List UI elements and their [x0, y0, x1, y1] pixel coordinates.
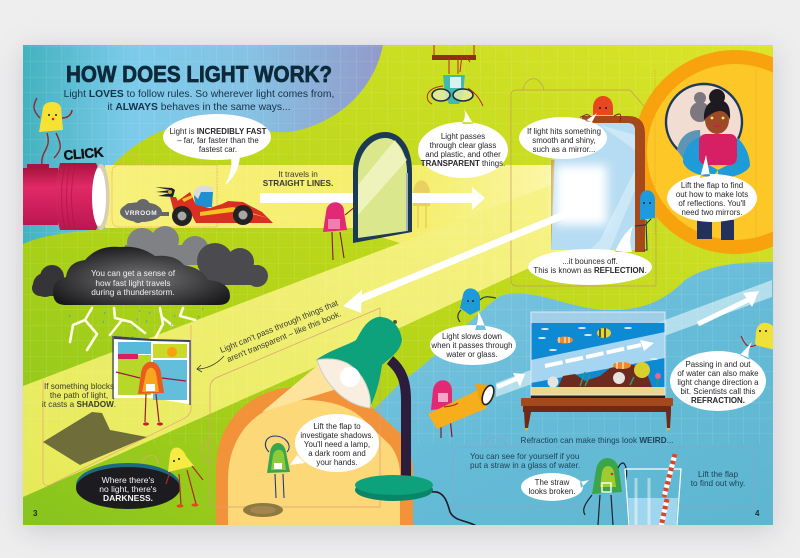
portrait: woman with mirror — [666, 84, 750, 240]
wheels — [172, 205, 253, 226]
arrow: dashed refraction in tank — [545, 340, 654, 366]
eyes and mouth — [711, 117, 724, 127]
arrow: straight line of light — [260, 187, 485, 210]
bubble: refraction: of water can also make — [677, 369, 759, 378]
beam: reflected light band — [23, 185, 568, 497]
bubble: investigate shadows: a dark room and — [308, 449, 366, 458]
page number 3: 3 — [33, 509, 38, 518]
character: orange holding book — [116, 362, 186, 426]
bubble: refraction: bit. Scientists call this — [680, 387, 756, 396]
lamp — [316, 317, 433, 501]
racing car — [155, 186, 273, 226]
face — [705, 111, 729, 134]
bubble: light slows down: Light slows down — [442, 332, 502, 341]
cloud: vrroom exhaust: VRROOM — [125, 210, 157, 217]
flap outline: horizontal car flap — [112, 154, 217, 227]
glass of water with straw — [625, 454, 681, 527]
shape: pale yellow lamp arch interior — [228, 400, 400, 525]
bubble: incredibly fast: Light is INCREDIBLY FAST — [170, 127, 266, 136]
faint character behind glass mirror — [413, 180, 430, 228]
title: HOW DOES LIGHT WORK? — [66, 61, 332, 87]
pink flap held — [699, 134, 737, 165]
text: lift flap why: to find out why. — [691, 479, 745, 488]
bubble: lift the flap mirrors: Lift the flap to find — [681, 181, 743, 190]
shape: light cone from lamp — [262, 365, 372, 412]
book held up — [113, 336, 190, 405]
character: yellow jumping on torch — [34, 98, 72, 166]
arrow: reflected ray — [343, 212, 564, 313]
bubble: if light hits — [519, 113, 607, 159]
label: click: CLICK — [63, 145, 104, 163]
arrow: curved to book — [197, 356, 224, 372]
subtitle: Light LOVES to follow rules. So wherever light comes from, — [64, 89, 334, 100]
bubble: investigate shadows: You'll need a lamp, — [304, 440, 370, 449]
flap outline: lamp flap — [201, 308, 380, 507]
bubble: refraction: REFRACTION. — [691, 396, 745, 405]
text: weird: Refraction can make things look WEIRD... — [521, 436, 673, 445]
shape: orange lamp arch — [216, 387, 413, 525]
bubble: light slows down: water or glass. — [445, 350, 498, 359]
bubble: bounces off: ...it bounces off. — [562, 257, 618, 266]
fish — [538, 327, 658, 369]
background: water wave area — [374, 262, 773, 525]
text: transparent note rotated: Light can't pass through things that — [219, 298, 340, 355]
flap outline: shadow flap — [43, 325, 191, 485]
hanging glass character — [427, 45, 483, 106]
bubble: transparent: and plastic, and other — [425, 150, 501, 159]
page number 4: 4 — [755, 509, 760, 518]
ring: orange circle — [638, 50, 773, 254]
helmet and driver — [194, 187, 213, 207]
bubble: investigate shadows: investigate shadows. — [300, 431, 374, 440]
hole: darkness: DARKNESS. — [103, 493, 153, 503]
title block — [64, 61, 334, 113]
bubble: straw looks broken: The straw — [535, 478, 570, 487]
text: thunderstorm: during a thunderstorm. — [91, 287, 175, 297]
bubble: straw looks broken: looks broken. — [529, 487, 575, 496]
text: straw instructions: put a straw in a glass of water. — [470, 461, 580, 470]
bubble: transparent — [418, 109, 508, 178]
hole: darkness: no light, there's — [99, 484, 157, 494]
hole: darkness: Where there's — [102, 475, 154, 485]
rear wing — [155, 187, 175, 197]
wing strut — [170, 197, 182, 212]
character: red on mirror top — [580, 96, 621, 122]
text: shadow: it casts a SHADOW. — [42, 400, 116, 409]
rocks and plants — [548, 362, 661, 388]
lamp shade — [316, 317, 402, 407]
mirror: reflective wall mirror — [551, 116, 645, 252]
shadow under green character — [243, 503, 283, 517]
lamp bulb — [340, 367, 360, 387]
bubble: incredibly fast — [163, 114, 271, 185]
bubble: light slows down: when it passes through — [430, 341, 513, 350]
shadow of book on floor — [43, 412, 147, 465]
bubble: bounces off — [528, 226, 652, 285]
legs — [697, 220, 734, 240]
reflection: grey hair — [677, 92, 710, 160]
cloud: dark left — [32, 265, 72, 297]
character: blue behind mirror — [635, 190, 655, 250]
mirror: arched glass pane — [353, 132, 412, 243]
hair — [704, 100, 730, 120]
character: blue by bubble — [458, 288, 496, 322]
cloud: main — [53, 247, 230, 305]
arms right — [718, 137, 750, 178]
stripes — [182, 195, 268, 218]
bubble: transparent: Light passes — [441, 132, 485, 141]
bubble: refraction: light change direction a — [677, 378, 759, 387]
bubble: if light hits: smooth and shiny, — [532, 136, 596, 145]
lamp cord — [432, 492, 478, 527]
bubble: investigate shadows — [290, 414, 379, 472]
bubble: light slows down — [430, 311, 516, 365]
hair bun — [709, 89, 725, 102]
bubble: if light hits: such as a mirror... — [533, 145, 595, 154]
bubble: lift the flap mirrors: of reflections. You'll — [678, 199, 746, 208]
text: straight lines: STRAIGHT LINES. — [263, 179, 333, 188]
bubble: investigate shadows: Lift the flap to — [313, 422, 361, 431]
lightning and rain — [66, 308, 203, 350]
text: shadow: If something blocks — [44, 382, 114, 391]
text: thunderstorm: You can get a sense of — [91, 268, 176, 278]
text: lift flap why: Lift the flap — [698, 470, 738, 479]
text: shadow — [42, 382, 116, 409]
text: transparent note rotated: aren't transparent – like this book. — [226, 309, 342, 364]
text: straw instructions — [470, 452, 580, 470]
bubble: refraction: Passing in and out — [686, 360, 751, 369]
bubble: lift the flap mirrors: need two mirrors. — [682, 208, 742, 217]
bubble: incredibly fast: fastest car. — [199, 145, 237, 154]
text: shadow: the path of light, — [50, 391, 108, 400]
aquarium tank — [531, 312, 665, 398]
flap outline: straw flap — [453, 437, 755, 507]
arrow: torch beam — [497, 373, 525, 387]
background: grid lines — [23, 45, 773, 445]
yellow torch — [428, 384, 496, 429]
hole: darkness — [76, 463, 180, 509]
bubble: transparent: TRANSPARENT things. — [421, 159, 505, 168]
lamp neck — [390, 360, 406, 480]
arrow: exit beam — [698, 291, 759, 324]
bubble: investigate shadows: your hands. — [316, 458, 358, 467]
character: green under lamp — [265, 436, 290, 498]
bubble: if light hits: If light hits something — [527, 127, 601, 136]
bubble: lift the flap mirrors — [667, 155, 757, 222]
aquarium table — [521, 398, 673, 430]
background: blue sky blob — [23, 45, 383, 244]
bubble: transparent: through clear glass — [430, 141, 496, 150]
bubble: refraction — [670, 342, 766, 411]
character: pink holding mirror — [323, 202, 356, 260]
text: thunderstorm: how fast light travels — [95, 278, 171, 288]
lamp shade knob — [393, 320, 397, 324]
body — [172, 192, 273, 223]
cloud: dark right — [197, 243, 268, 287]
lamp shade opening — [317, 359, 370, 408]
bubble: lift the flap mirrors: out how to make lots — [676, 190, 748, 199]
beam: torch through water — [496, 280, 772, 397]
cloud: grey back — [125, 226, 215, 265]
text: lift flap why — [691, 470, 745, 488]
cloud: vrroom exhaust — [120, 199, 169, 223]
text: straight lines — [263, 170, 333, 188]
character: yellow at hole — [166, 448, 203, 508]
beam: horizontal light from torch — [105, 165, 556, 243]
text: straw instructions: You can see for yourself if you — [470, 452, 580, 461]
lamp base — [355, 479, 433, 501]
bubble: bounces off: This is known as REFLECTION. — [533, 266, 647, 275]
bubble: straw looks broken — [521, 473, 589, 501]
character: pink with yellow torch — [431, 380, 452, 438]
subtitle: it ALWAYS behaves in the same ways... — [107, 102, 291, 113]
clouds: thunderstorm — [32, 226, 268, 305]
mirror circle — [666, 84, 742, 160]
text: straight lines: It travels in — [278, 170, 318, 179]
arms left — [683, 137, 718, 178]
character: green with glass — [584, 458, 627, 525]
bubble: incredibly fast: – far, far faster than the — [177, 136, 259, 145]
torch: red flashlight — [23, 163, 110, 230]
flap outline: mirror flap — [511, 79, 656, 286]
character: yellow at right edge — [741, 323, 775, 350]
